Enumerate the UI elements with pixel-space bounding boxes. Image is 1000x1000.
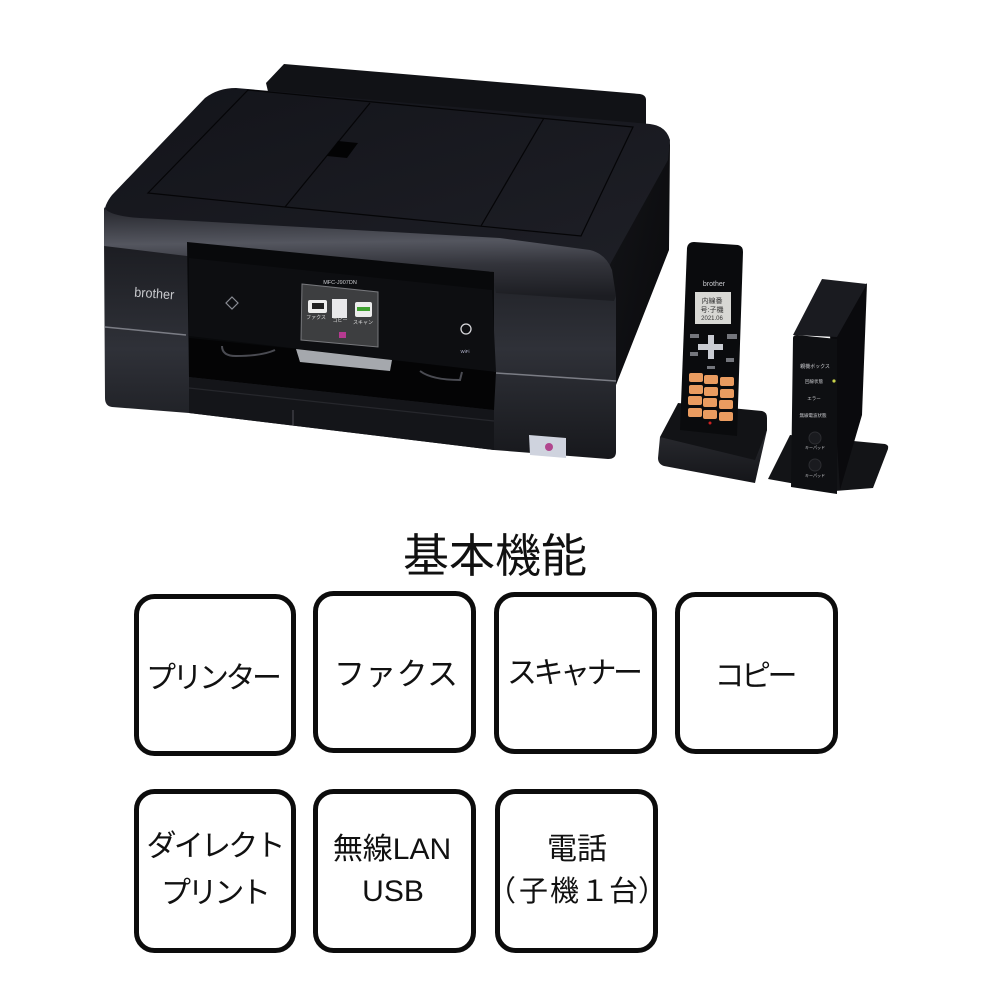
lid seams bbox=[148, 90, 633, 236]
base buttons bbox=[809, 432, 821, 471]
feature: direct print: ダイレクト bbox=[146, 821, 286, 865]
LCD screen: コピー bbox=[332, 318, 348, 324]
cradle top bbox=[660, 403, 767, 460]
lower front body bbox=[104, 240, 616, 459]
feature: wireless LAN and USB: USB bbox=[362, 875, 424, 908]
LCD screen: スキャン bbox=[353, 320, 373, 326]
feature: scanner bbox=[496, 594, 654, 752]
NFC mark bbox=[226, 297, 238, 309]
fax icon bbox=[308, 300, 327, 313]
base front bbox=[791, 335, 837, 494]
front control panel bbox=[187, 242, 494, 410]
feature: telephone: 電話 bbox=[547, 824, 607, 868]
handset display bbox=[695, 292, 731, 324]
paper guide bbox=[296, 349, 392, 371]
power button bbox=[461, 324, 471, 334]
cradle front bbox=[658, 430, 767, 483]
WiFi label: WiFi bbox=[460, 349, 470, 354]
feature: fax: ファクス bbox=[334, 649, 458, 694]
handset display: 内線番 bbox=[702, 296, 722, 305]
status labels: エラー bbox=[807, 396, 821, 402]
status labels: 回線状態 bbox=[805, 378, 823, 385]
feature: wireless LAN and USB: 無線LAN bbox=[333, 833, 451, 866]
status LED bbox=[832, 379, 836, 383]
lid top surface bbox=[104, 88, 670, 268]
status labels: 無線電波状態 bbox=[800, 412, 827, 419]
feature: telephone bbox=[487, 792, 667, 950]
rear paper tray bbox=[266, 64, 646, 140]
status labels: キーパッド bbox=[805, 445, 825, 450]
feature: wireless LAN and USB bbox=[316, 792, 474, 950]
printer bbox=[104, 64, 670, 459]
handset logo: brother bbox=[703, 281, 726, 288]
feature: printer: プリンター bbox=[146, 653, 282, 697]
keypad bbox=[688, 373, 734, 421]
model name: MFC-J907DN bbox=[323, 280, 357, 286]
paper cassette bbox=[189, 377, 494, 450]
wireless base station bbox=[768, 279, 888, 494]
handset display: 2021.06 bbox=[701, 316, 724, 322]
feature: fax bbox=[316, 594, 474, 750]
handset display: 号:子機 bbox=[701, 305, 723, 314]
feature: scanner: スキャナー bbox=[507, 648, 643, 692]
document slot bbox=[327, 141, 358, 158]
status labels: キーパッド bbox=[805, 473, 825, 478]
status labels: 親機ボックス bbox=[800, 363, 830, 370]
sticker badge bbox=[529, 435, 566, 458]
base top bbox=[793, 279, 867, 337]
tray grip right bbox=[420, 371, 462, 380]
brother logo: brother bbox=[134, 285, 175, 302]
screen labels: ファクス bbox=[306, 315, 326, 321]
feature: copy: コピー bbox=[714, 651, 798, 695]
feature: copy bbox=[678, 594, 836, 752]
ink colours bbox=[339, 332, 346, 338]
charge LED bbox=[708, 422, 712, 424]
handset body bbox=[680, 242, 743, 436]
cordless handset in cradle bbox=[658, 242, 767, 483]
navigation pad bbox=[698, 335, 723, 359]
split lines bbox=[105, 327, 616, 381]
status labels bbox=[800, 363, 830, 478]
soft keys bbox=[690, 334, 737, 369]
stand plate bbox=[768, 435, 888, 491]
title: 基本機能 bbox=[403, 520, 587, 586]
lid front lip bbox=[104, 207, 616, 301]
paper output tray bbox=[189, 338, 496, 410]
feature: direct print: プリント bbox=[161, 868, 271, 912]
LCD screen bbox=[301, 284, 378, 347]
tray grip left bbox=[222, 346, 275, 356]
printer right side bbox=[596, 127, 670, 452]
scan icon bbox=[355, 302, 372, 317]
copy icon bbox=[332, 299, 347, 318]
base side bbox=[830, 283, 867, 490]
feature: direct print bbox=[136, 792, 294, 950]
feature: printer bbox=[136, 596, 294, 754]
feature: telephone: （子機１台） bbox=[487, 868, 667, 910]
